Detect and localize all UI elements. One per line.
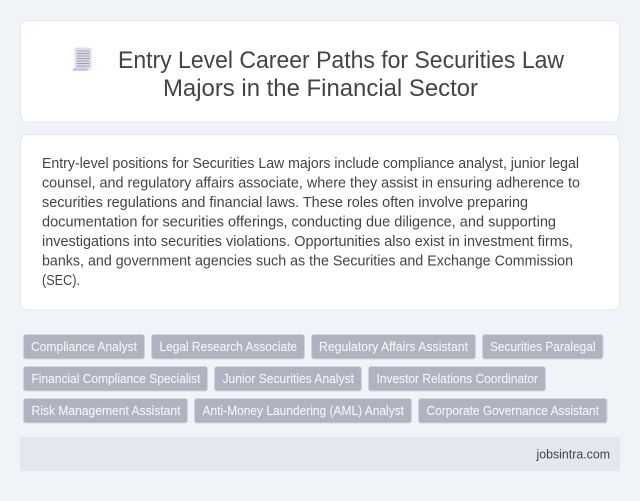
tag: Securities Paralegal bbox=[482, 334, 603, 359]
footer credit: jobsintra.com bbox=[536, 446, 610, 462]
tag: Anti-Money Laundering (AML) Analyst bbox=[194, 398, 412, 423]
tag: Investor Relations Coordinator bbox=[368, 366, 546, 391]
tag: Regulatory Affairs Assistant: Regulatory Affairs Assistant bbox=[319, 339, 468, 354]
panel: description bbox=[20, 134, 620, 310]
tag: Corporate Governance Assistant: Corporate Governance Assistant bbox=[426, 403, 599, 418]
tag: Compliance Analyst bbox=[24, 334, 144, 359]
tag: Securities Paralegal: Securities Paralegal bbox=[490, 339, 596, 354]
panel: header bbox=[20, 20, 620, 122]
tag: Legal Research Associate bbox=[152, 334, 304, 359]
tag: Corporate Governance Assistant bbox=[418, 398, 607, 423]
tag: Risk Management Assistant bbox=[24, 398, 188, 423]
tag: Legal Research Associate: Legal Research Associate bbox=[160, 339, 297, 354]
tag: Regulatory Affairs Assistant bbox=[312, 334, 476, 359]
text block: description: counsel, and regulatory affairs associate, where they assist in ensuring adherence to bbox=[42, 176, 580, 192]
title: Entry Level Career Paths for Securities Law bbox=[118, 47, 565, 74]
tag: Financial Compliance Specialist: Financial Compliance Specialist bbox=[32, 371, 201, 386]
tag list bbox=[24, 334, 607, 423]
tag: Risk Management Assistant: Risk Management Assistant bbox=[32, 403, 181, 418]
text block: description: (SEC). bbox=[42, 273, 80, 289]
tag: Financial Compliance Specialist bbox=[24, 366, 208, 391]
title: Majors in the Financial Sector bbox=[163, 75, 478, 102]
title bbox=[118, 47, 565, 102]
tag: Junior Securities Analyst bbox=[214, 366, 362, 391]
text block: description: Entry-level positions for Securities Law majors include compliance analyst, junior legal bbox=[42, 156, 579, 172]
tag: Investor Relations Coordinator: Investor Relations Coordinator bbox=[376, 371, 539, 386]
icon: document scroll bbox=[72, 48, 92, 71]
text block: description bbox=[42, 156, 580, 289]
text block: description: banks, and government agencies such as the Securities and Exchange Commission bbox=[42, 254, 573, 270]
tag: Compliance Analyst: Compliance Analyst bbox=[31, 339, 137, 354]
text block: description: documentation for securities offerings, conducting due diligence, and supporting bbox=[42, 214, 556, 230]
tag: Anti-Money Laundering (AML) Analyst: Anti-Money Laundering (AML) Analyst bbox=[202, 403, 404, 418]
text block: description: investigations into securities violations. Opportunities also exist in investment firms, bbox=[42, 234, 573, 250]
text block: description: securities regulations and financial laws. These roles often involve preparing bbox=[42, 195, 528, 211]
footer bbox=[20, 437, 620, 471]
tag: Junior Securities Analyst: Junior Securities Analyst bbox=[222, 371, 354, 386]
